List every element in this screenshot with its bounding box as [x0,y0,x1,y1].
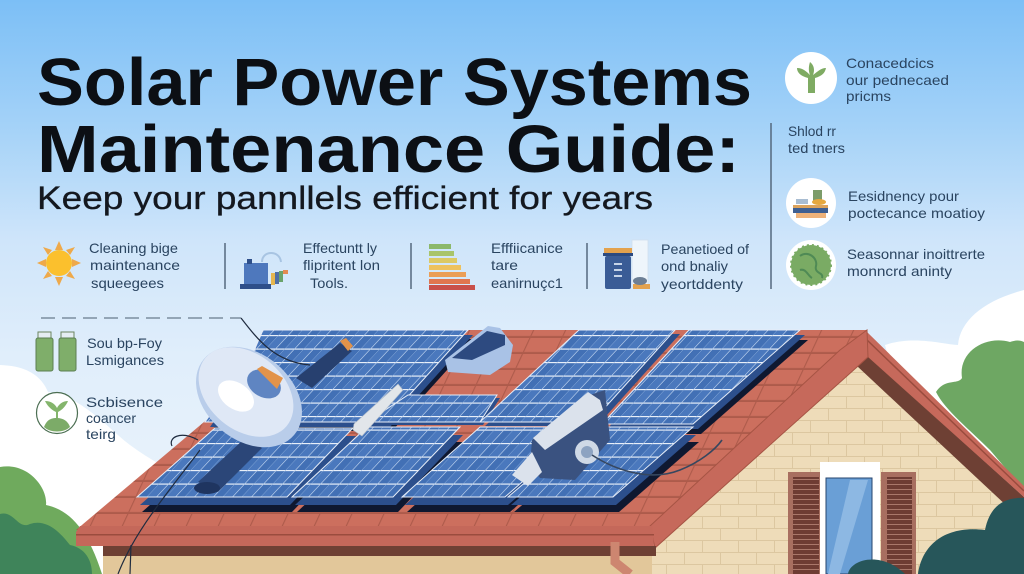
shutter right [881,472,916,574]
text: efficiency monitor [848,188,985,221]
dashed leader line [41,317,241,319]
title: Maintenance Guide: [37,112,740,187]
panel: top right [602,330,808,434]
text: protection: Peanetioed of [661,241,749,257]
item: protection [603,240,749,292]
text: shield: Shlod rr [788,123,836,139]
panel: lower 3 [402,427,590,512]
panel: top middle strip [367,395,500,425]
cleaning dish tool [176,326,322,468]
text: protection [661,241,749,292]
icon: jars [36,332,76,371]
text: tools: Tools. [310,275,348,291]
subtitle: Keep your pannllels efficient for years [37,180,653,216]
text: supplies: Lsmigances [86,352,164,368]
icon: desk [786,178,836,228]
icon: sun [37,241,81,286]
text: cleaning: squeegees [91,275,164,291]
text: protection: ond bnaliy [661,258,728,274]
text: plant: pricms [846,88,891,104]
icon: storage unit [603,240,650,289]
dividers [225,123,771,289]
title [37,45,752,187]
item: efficiency monitor [786,178,985,228]
panel: top left [205,330,475,431]
text: tools [303,240,380,291]
text: efficiency monitor: Eesidnency pour [848,188,959,204]
panel: lower 2 [292,427,465,512]
icon: energy bars [429,244,475,290]
text: efficiency: Efffiicanice [491,240,563,256]
item: science [36,392,163,442]
window glass [826,478,872,574]
icon: seedling circle [36,392,78,434]
monitor device [445,326,513,375]
icon: tools [240,253,288,289]
text: plant: our pednecaed [846,72,949,88]
item: efficiency [429,240,563,291]
text: seasonal: Seasonnar inoittrerte [847,246,985,262]
text: shield [788,123,845,156]
icon: green globe [786,240,836,290]
text: efficiency: eanirnuçc1 [491,275,563,291]
text: supplies [86,335,164,368]
text: cleaning: maintenance [90,257,180,273]
text: tools: flipritent lon [303,257,380,273]
item: supplies [36,332,164,371]
fascia [76,526,654,546]
text: efficiency [491,240,563,291]
cables [118,318,310,574]
text: cleaning [89,240,180,291]
text: science: Scbisence [86,394,163,410]
item: cleaning [37,240,180,291]
brush wand lower [194,438,262,494]
window with shutters [788,462,916,574]
panel clamp [353,384,403,436]
panel: lower 4 [508,427,699,512]
text: science [86,394,163,442]
text: shield: ted tners [788,140,845,156]
text: plant: Conacedcics [846,55,934,71]
inspection device [512,390,722,486]
cloud right [885,290,1024,480]
text: science: coancer [86,410,136,426]
bush bottom right [848,498,1024,574]
text: seasonal: monncrd aninty [847,263,952,279]
tree right [936,340,1024,490]
item: top right plant [785,52,949,104]
gable wall [652,362,1024,574]
text: cleaning: Cleaning bige [89,240,178,256]
text: efficiency monitor: poctecance moatioy [848,205,985,221]
icon: sprout [785,52,837,104]
solar panels [137,330,808,512]
panel: top centre right [480,330,680,426]
cloud left [0,365,190,574]
roof right edge [650,330,868,548]
text: seasonal [847,246,985,279]
text: protection: yeortddenty [661,276,743,292]
title: Solar Power Systems [37,45,752,120]
window frame [820,462,880,574]
text: efficiency: tare [491,257,518,273]
roof [76,330,868,556]
roof tiles [76,330,867,530]
tree left [0,466,102,574]
fascia shadow [103,546,656,556]
text: plant [846,55,949,104]
downpipe [615,542,630,574]
panel: lower 1 [137,428,358,512]
item: tools [240,240,380,291]
text: tools: Effectuntt ly [303,240,377,256]
house front wall [103,550,663,574]
text: supplies: Sou bp-Foy [87,335,162,351]
text: science: teirg [86,426,116,442]
item: seasonal [786,240,985,290]
gable eave [857,332,1024,522]
brush wand upper [296,338,353,388]
shutter left [788,472,823,574]
